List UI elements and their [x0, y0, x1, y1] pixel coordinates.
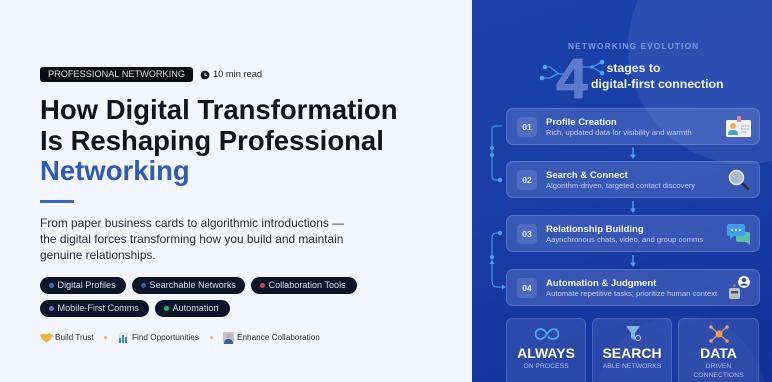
card: relationship building: Aaynchronous chats, video, and group comms	[546, 235, 703, 244]
card: profile creation: Rich, updated data for visibility and warmth	[546, 128, 692, 137]
tag: digital profiles: Digital Profiles	[58, 280, 116, 290]
icon: magnifying glass	[728, 170, 750, 190]
stat: always on process: ON PROCESS	[523, 363, 569, 370]
intro text: From paper business cards to algorithmic introductions —	[40, 216, 344, 230]
icon: robot and person	[729, 276, 750, 299]
tag: searchable networks	[132, 277, 245, 294]
tag: searchable networks: Searchable Networks	[150, 280, 236, 290]
arrow: 1 to 2	[630, 147, 636, 159]
stat: data driven connections: DATA	[700, 345, 737, 361]
title: Networking	[40, 155, 190, 186]
topic tags	[40, 277, 357, 317]
separator dot	[210, 336, 213, 339]
card: profile creation: Profile Creation	[546, 116, 617, 128]
stat: data driven connections	[678, 318, 759, 382]
title: Is Reshaping Professional	[40, 125, 384, 156]
stat: always on process	[506, 318, 586, 382]
tag: mobile-first comms	[40, 300, 149, 317]
label: build trust: Build Trust	[55, 333, 94, 342]
tag: collaboration tools	[251, 277, 357, 294]
label: enhance collaboration: Enhance Collaboration	[237, 333, 320, 342]
separator dot	[104, 336, 107, 339]
panel: networking evolution background	[472, 0, 772, 382]
card: search and connect	[506, 161, 760, 198]
tag: collaboration tools: Collaboration Tools	[268, 280, 346, 290]
stat: searchable networks: SEARCH	[602, 345, 662, 361]
badge: professional networking: PROFESSIONAL NETWORKING	[48, 69, 185, 79]
icon: bar chart	[118, 333, 128, 343]
icon: infinity loop	[535, 328, 559, 340]
arrow: 2 to 3	[630, 201, 636, 213]
icon: node hub	[709, 325, 729, 343]
icon: large 4 with network lines	[540, 55, 604, 103]
card: profile creation	[506, 108, 760, 145]
tag: digital profiles	[40, 277, 126, 294]
stat: searchable networks	[592, 318, 672, 382]
tag: automation: Automation	[172, 303, 219, 313]
icon: chat bubbles	[727, 224, 750, 245]
benefits row	[40, 332, 320, 344]
title: How Digital Transformation	[40, 94, 398, 125]
card: automation and judgment	[506, 269, 760, 306]
panel headline	[591, 61, 724, 90]
read time: 10 min read	[213, 69, 262, 79]
card: relationship building: 03	[522, 229, 532, 239]
card: relationship building: Relationship Building	[546, 224, 644, 234]
card: search and connect: Search & Connect	[546, 170, 628, 180]
stat: data driven connections: CONNECTIONS	[693, 372, 744, 379]
title	[40, 94, 398, 186]
icon: id card	[726, 116, 751, 137]
card: relationship building	[506, 215, 760, 252]
icon: handshake	[40, 334, 53, 342]
panel eyebrow: NETWORKING EVOLUTION	[568, 41, 699, 51]
label: find opportunities: Find Opportunities	[132, 333, 199, 342]
intro text: genuine relationships.	[40, 248, 156, 262]
tag: automation	[155, 300, 230, 317]
stat: searchable networks: ABLE NETWORKS	[603, 363, 661, 370]
connector: stages 1 to 2	[490, 125, 502, 182]
stat: always on process: ALWAYS	[517, 345, 575, 361]
card: search and connect: Algorithm-driven, targeted contact discovery	[546, 181, 695, 190]
tag: mobile-first comms: Mobile-First Comms	[58, 303, 139, 313]
card: profile creation: 01	[522, 122, 532, 132]
intro text	[40, 216, 344, 262]
badge: professional networking	[40, 67, 193, 82]
card: automation and judgment: 04	[522, 283, 532, 293]
intro text: the digital forces transforming how you build and maintain	[40, 232, 343, 246]
card: automation and judgment: Automation & Judgment	[546, 278, 656, 288]
icon: funnel	[626, 326, 641, 341]
connector: stages 3 to 4	[490, 230, 506, 290]
card: search and connect: 02	[522, 175, 532, 185]
arrow: 3 to 4	[630, 255, 636, 267]
panel headline: stages to	[606, 61, 660, 75]
panel headline: digital-first connection	[591, 76, 724, 90]
stat: data driven connections: DRIVEN	[706, 363, 731, 370]
card: automation and judgment: Automate repetitive tasks; prioritize human context	[546, 289, 717, 298]
title accent rule	[40, 200, 74, 202]
icon: person	[223, 332, 234, 344]
